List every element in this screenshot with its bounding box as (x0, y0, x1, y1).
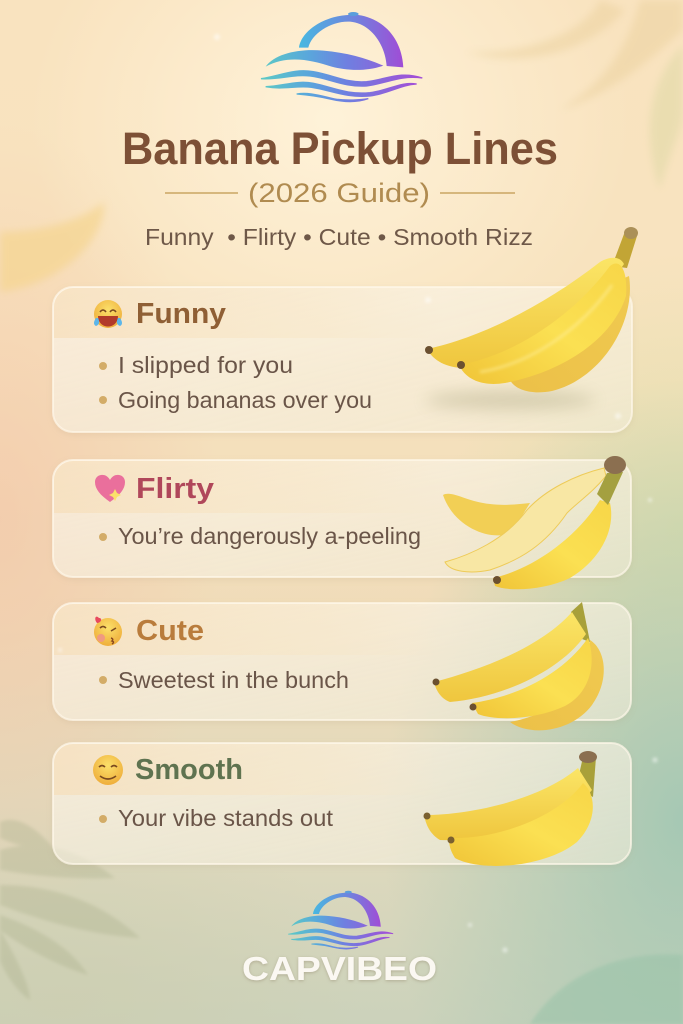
panel: cute (53, 603, 631, 720)
panel: flirty (53, 460, 631, 577)
heading: funny: Funny (136, 298, 226, 330)
icon: sparkling heart emoji (95, 475, 125, 502)
illustration: smooth bananas (424, 751, 597, 866)
panel: funny (53, 287, 632, 432)
list item: Sweetest in the bunch (118, 667, 349, 693)
list item: Going bananas over you (118, 387, 372, 413)
title: Banana Pickup Lines (122, 123, 558, 174)
footer wordmark: CAPVIBEO (242, 950, 437, 987)
footer logo: cap and waves (288, 891, 393, 949)
heading: smooth: Smooth (135, 754, 243, 786)
panel: smooth (53, 743, 631, 864)
illustration: flirty peeled banana (443, 456, 626, 589)
heading: cute: Cute (136, 615, 204, 647)
logo: cap and waves (261, 12, 422, 101)
illustration: funny bananas (425, 227, 638, 409)
list item: You’re dangerously a-peeling (118, 523, 421, 549)
subtitle: 2026 guide with rules: (2026 Guide) (248, 178, 430, 208)
icon: blowing kiss emoji (94, 617, 122, 646)
icon: tears of joy emoji (94, 300, 122, 328)
icon: smirking emoji (93, 755, 123, 785)
illustration: cute bananas (432, 602, 604, 730)
list item: Your vibe stands out (118, 805, 334, 831)
heading: flirty: Flirty (136, 473, 214, 505)
sparkles (58, 34, 658, 952)
list item: I slipped for you (118, 352, 293, 378)
category line: Funny • Flirty • Cute • Smooth Rizz (145, 224, 533, 250)
